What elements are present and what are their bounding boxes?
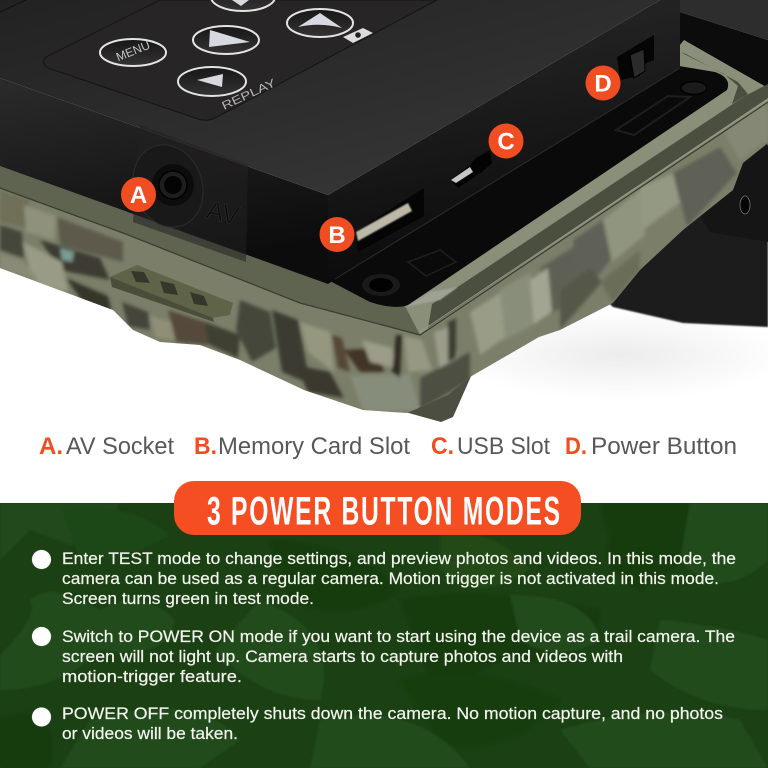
embossed tray mark right (616, 96, 690, 135)
badge C (488, 124, 524, 158)
rear housing gap (680, 12, 768, 110)
stand mounting hole (740, 196, 750, 214)
play button (193, 26, 259, 54)
camera foot (405, 374, 472, 422)
tray screw right (681, 82, 707, 94)
REPLAY label: REPLAY (220, 77, 278, 113)
panel: camera product photo (0, 0, 768, 422)
tray black recess (328, 66, 728, 307)
frame light surface right (405, 40, 768, 335)
camera body front face (0, 78, 328, 284)
camo right patches (470, 280, 530, 355)
camera body right face (328, 0, 680, 284)
camo housing face (0, 90, 768, 420)
panel: white background (0, 0, 768, 503)
mode 2: power on: screen will not light up. Camera starts to capture photos and videos with (62, 648, 623, 666)
mode 2: power on: motion-trigger feature. (62, 668, 242, 686)
legend item C: USB Slot (457, 433, 550, 460)
camera icon (343, 28, 373, 43)
mode 3: power off: or videos will be taken. (62, 725, 238, 743)
legend item B: Memory Card Slot (218, 433, 410, 460)
legend item D: D. (565, 433, 587, 460)
stand box section (700, 145, 768, 242)
photo button (287, 9, 353, 37)
rim line (0, 102, 768, 335)
badge D: D (594, 70, 612, 98)
frame dark band right (428, 84, 768, 328)
mode 2: power on: Switch to POWER ON mode if you want to start using the device as a trail camera. The (62, 628, 735, 646)
MENU button: MENU (114, 38, 152, 64)
badge D (586, 66, 620, 100)
mode 1: test: camera can be used as a regular camera. Motion trigger is not activated in this mode. (62, 570, 719, 588)
AV flap (133, 125, 248, 262)
usb slot (451, 150, 492, 188)
mode 1: test: Enter TEST mode to change settings, and preview photos and videos. In this mode, the (62, 550, 736, 568)
panel: green camouflage background (0, 503, 768, 768)
title pill: 3 POWER BUTTON MODES (207, 490, 562, 534)
legend item D: Power Button (591, 433, 737, 460)
top button (211, 0, 275, 11)
frame top surface left (0, 160, 430, 338)
camo left patches (0, 190, 30, 228)
badge B: B (328, 222, 346, 249)
embossed tray mark left (408, 250, 456, 276)
legend item A: A. (39, 433, 63, 460)
mode 1: test (32, 550, 736, 608)
camera body top surface (0, 0, 660, 195)
mode list (32, 550, 736, 743)
frame dark band top corner (680, 52, 748, 104)
legend item B: B. (194, 433, 217, 460)
camo centre patches (236, 300, 276, 362)
memory card slot (355, 188, 424, 252)
top left panel edge (0, 0, 26, 12)
corner highlight (405, 287, 458, 307)
black seam on right face (335, 68, 680, 279)
rim highlight (420, 99, 768, 332)
legend (39, 433, 737, 460)
black stand behind camera (600, 120, 768, 327)
badge A (121, 177, 156, 212)
mode 2: power on (32, 627, 735, 686)
tab clip (110, 265, 233, 322)
badge B (320, 217, 354, 252)
replay button (178, 67, 246, 96)
badge A: A (130, 182, 147, 209)
mode 3: power off: POWER OFF completely shuts down the camera. No motion capture, and no photos (62, 705, 723, 723)
AV embossed label: AV (204, 195, 243, 231)
ground shadow (450, 310, 768, 400)
power switch (617, 35, 654, 80)
keypad panel (43, 0, 437, 120)
badge C: C (497, 128, 515, 156)
mode 1: test: Screen turns green in test mode. (62, 590, 314, 608)
legend item A: AV Socket (66, 433, 174, 460)
mode 3: power off (32, 705, 723, 743)
AV socket (122, 135, 214, 237)
tray screw left (362, 274, 400, 296)
legend item C: C. (431, 433, 454, 460)
tab plate (123, 233, 300, 330)
MENU button (100, 38, 166, 66)
rear housing top right (680, 0, 768, 40)
